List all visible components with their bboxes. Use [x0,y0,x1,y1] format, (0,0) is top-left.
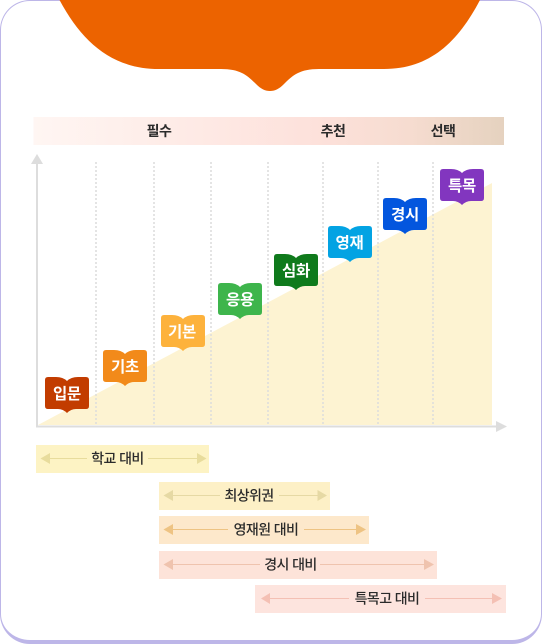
range bar: 영재원 대비 [159,516,369,544]
orange speech bubble [60,0,480,91]
badge: 특목: 특목 [448,177,476,195]
badge: 영재 [328,226,372,262]
badge: 특목 [440,169,484,205]
range bar: 경시 대비 [159,551,437,579]
badge: 기본 [161,315,205,351]
range bar: 영재원 대비: 영재원 대비 [234,522,298,538]
range bar: 최상위권 [159,482,330,510]
range bar: 최상위권: 최상위권 [224,488,274,504]
range bar: 학교 대비 [36,445,209,473]
badge: 응용 [218,283,262,319]
badge: 기초 [103,350,147,386]
badge: 심화 [274,254,318,290]
horizontal axis arrow [36,421,507,432]
badge: 심화: 심화 [282,262,310,280]
vertical axis arrow [31,154,43,427]
badge: 경시 [383,198,427,234]
chart: level staircase [31,154,507,432]
badge: 응용: 응용 [226,291,254,309]
badge: 영재: 영재 [336,234,363,252]
range bar: 경시 대비: 경시 대비 [264,556,317,572]
label: recommended: 추천 [321,123,345,139]
label: optional: 선택 [431,123,455,139]
badge: 경시: 경시 [391,206,419,224]
label: required: 필수 [147,123,172,139]
range bar: 특목고 대비 [255,585,506,613]
rising area [38,183,492,425]
range bar: 학교 대비: 학교 대비 [91,450,144,466]
header band [34,117,504,145]
range bar: 특목고 대비: 특목고 대비 [355,590,419,606]
badge: 기초: 기초 [111,358,139,376]
badge: 기본: 기본 [168,323,196,341]
badge: 입문 [45,377,89,413]
badge: 입문: 입문 [53,385,81,403]
